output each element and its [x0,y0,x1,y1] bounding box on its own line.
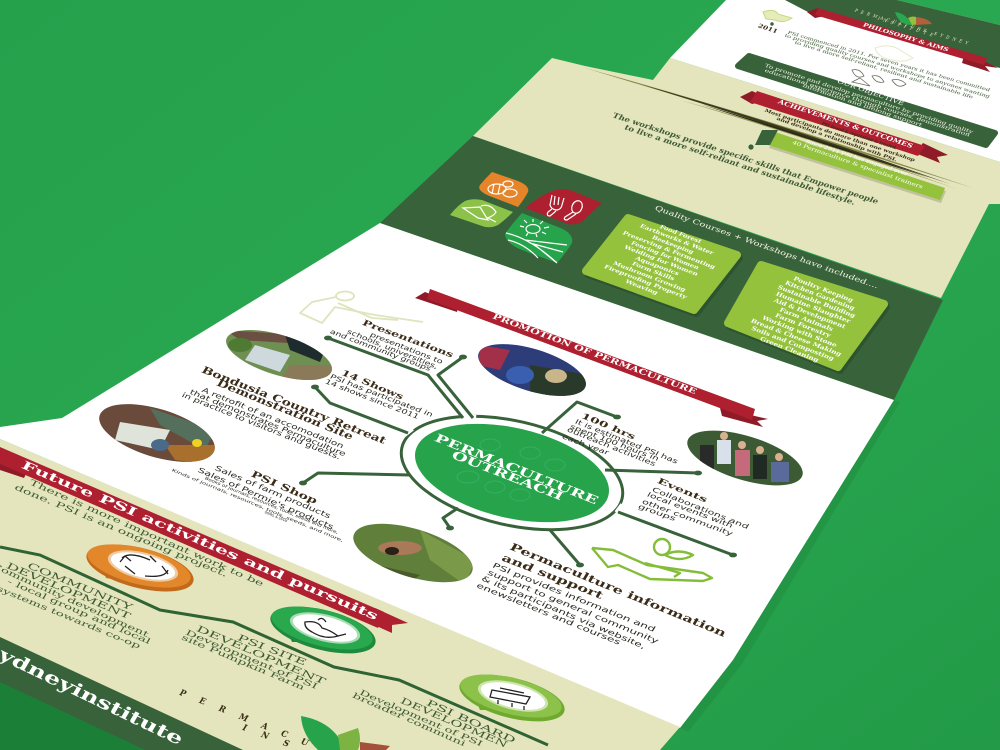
year 2011: 2011 [756,23,779,35]
text: permaculture information: support to general community [486,568,661,646]
photo: garden beds [226,330,332,380]
text: events: other community [640,498,735,538]
text: presentations: and community groups [328,328,432,373]
text: presentations: presentations to [368,331,445,366]
text: 100 hours: It is estimated PSI has [573,418,679,466]
icon: orange bee leaf [479,172,528,207]
text: community development [0,560,152,651]
text: Bondusia country retreat: A retrofit of an accomodation [200,386,345,451]
text: permaculture information: and support [499,553,606,603]
text: community development: COMMUNITY [25,560,137,613]
text: events: local events with [645,491,735,530]
text: 14 shows: 14 shows since 2011 [323,378,421,421]
text: permaculture information: PSI provides information and [491,561,657,634]
ribbon: philosophy and aims [807,8,998,72]
hub disc [405,407,619,539]
ring gaps [403,416,623,513]
panel: dark footer band [0,637,243,750]
text: workshops intro [611,111,880,207]
text: workshops intro: to live a more self-reliant and sustainable lifestyle. [623,123,857,207]
callout: our objective box: OUR OBJECTIVE [835,78,906,108]
photo: group of people [687,430,803,486]
hub leaf pattern [457,439,565,501]
card: course list one: Fireproofing Property [602,264,689,301]
text: Bondusia country retreat: in practice to visitors and guests. [180,392,342,462]
icon: presenter [300,292,423,323]
text: 100 hours: spent 100 hours in [568,423,661,463]
card: course list two: Soils and Composting [750,325,836,363]
panel: cream workshops page [473,56,1000,298]
card: course list one [586,218,739,313]
text: Bondusia country retreat: Demonstration Site [214,378,356,443]
ribbon: achievements and outcomes [740,91,948,163]
text: achievements: Most participants do more than one workshop [763,108,917,163]
shadow on right page edge [680,400,900,732]
text: PSI shop: Sales of farm products [213,464,332,520]
icon: pale sketch [875,46,913,61]
text: events [636,476,751,538]
hub title [432,432,601,508]
text: PSI shop: books, & DVDs [264,510,288,523]
text: 14 shows: PSI has participated in [328,373,435,419]
text: PSI site development: site Pumpkin Farm [180,633,308,693]
hub ring [390,397,634,549]
text: events: Collaborations and [650,486,751,531]
panel: white outreach page [0,223,894,728]
icon: 2011 plant [763,10,792,26]
ribbon: promotion of permaculture [415,289,768,427]
text: PSI site development: Development of PSI [184,628,320,691]
card: course list two: Humaine Slaughter [774,291,852,325]
card: course list one: Preserving & Fermenting [621,230,718,271]
text: PSI site development [180,624,328,693]
callout: our objective box [738,56,995,145]
text: PSI shop: Kinds of journals, resources, tools, seeds, and more, [171,468,344,543]
text: achievements: and develop a relationship with PSI. [775,116,899,163]
ribbon: philosophy and aims: PHILOSOPHY & AIMS [861,22,951,54]
heading: quality courses: Quality Courses + Workshops have included.... [653,204,880,290]
ribbon: future activities [0,447,408,633]
icon: green sun and field leaf [505,213,572,263]
photo: cob oven in forest [353,524,473,582]
text: presentations: Presentations [360,318,456,360]
card: course list one: Earthworks & Water [638,223,716,257]
text: achievements: PSI brand & reputation is trusted. [820,120,899,151]
callout: our objective box: educational experience through courses, demonstration [763,68,972,138]
panel: dark courses band [380,136,943,400]
hub diagram [299,336,737,567]
card: course list one: Welding for Women [621,244,701,278]
text: permaculture information [475,542,729,651]
text: 14 shows [323,368,435,421]
card: course list one: Aquaponics [632,255,681,278]
text: 14 shows: 14 Shows [339,368,406,402]
text: PSI board development [351,688,518,750]
text: PSI shop: Books of journals, resources, tools, seeds and more, [204,476,339,535]
callout: trainers banner [748,130,946,203]
text: 100 hours: each year [560,433,611,457]
icon: hand with leaves [592,539,712,581]
text: 100 hours [560,410,679,468]
card: course list two: Farm Forestry [773,313,833,340]
header band [785,0,1000,68]
card: course list two: Sustainable Building [776,284,857,320]
text: philosophy paragraph [784,30,992,100]
logo: footer wordmark: PERMACU [177,688,311,748]
text: PSI site development: DEVELOPMENT [194,624,328,687]
card: course list two: Green Cleaning [758,336,820,364]
header logo text: INSTITUTE [876,16,935,38]
card: course list one: Mushroom Growing [611,260,688,294]
panel: top philosophy page [670,0,1000,162]
card: course list one: Weaving [622,278,661,297]
icon: red tools leaf [525,189,602,224]
text: Bondusia country retreat: Bondusia Country Retreat [199,365,388,447]
card: course list one: Beekeeping [650,234,696,256]
hub title: PERMACULTURE [432,432,601,508]
text: presentations: schools, universities, [345,328,440,371]
text: achievements [764,108,917,163]
card: course list two: Aid & Development [771,297,848,331]
card: course list two: Kitchen Gardening [783,280,857,312]
photo: produce table [99,404,215,462]
ribbon: achievements and outcomes: ACHIEVEMENTS & OUTCOMES [775,99,914,150]
card: course list two: Farm Animals [778,307,835,333]
marker: PSI site development [266,598,380,662]
text: future intro [13,478,265,589]
fold crease streak [585,68,973,190]
marker: community development [82,535,198,601]
icon: light green bucket leaf [450,199,513,227]
text: events: groups [636,504,677,523]
text: PSI board development: PSI BOARD [424,698,518,745]
text: PSI shop: Sales of Permie's products [196,466,335,532]
text: 100 hours: 100 hrs [579,410,638,442]
spokes [303,338,733,565]
callout: our objective box: To promote and develop permaculture by providing quality [763,62,976,135]
icon: seedlings [852,70,906,86]
text: permaculture information: enewsletters and courses [475,581,624,647]
text: future intro: done. PSI is an ongoing project. [13,483,229,579]
photo: blue workers [478,344,586,396]
text: future intro: There is more important work to be [28,478,265,589]
callout: trainers banner: 40 Permaculture & specialist trainers [790,140,925,191]
text: philosophy paragraph: PSI commenced in 2011. For seven years it has been committed [786,30,992,93]
text: workshops intro: The workshops provide specific skills that Empower people [611,111,880,206]
text: philosophy paragraph: to live a more self-reliant, resilient and sustainable life [793,40,976,100]
text: PSI shop: PSI Shop [249,468,321,506]
text: presentations [328,318,456,373]
card: course list two: Bread & Cheese Making [749,318,843,358]
logo: footer wordmark: INS [240,722,292,749]
text: community development: DEVELOPMENT [4,560,133,621]
hub title: OUTREACH [449,450,565,503]
timeline zigzag [0,547,548,745]
callout: our objective box: information and lifelong support [801,82,924,128]
text: Bondusia country retreat [180,365,388,462]
text: permaculture information: Permaculture information [507,542,729,640]
text: PSI board development: broader communi [351,691,467,748]
text: Bondusia country retreat: that demonstrates Permaculture [188,388,347,459]
card: course list one: Form Skills [630,261,677,283]
panel: cream future activities page [0,439,680,750]
text: PSI board development: DEVELOPMEN [398,696,510,750]
text: PSI site development: PSI SITE [235,632,309,667]
ribbon: promotion of permaculture: PROMOTION OF PERMACULTURE [491,312,698,396]
card: course list one: Food Forest [658,224,704,246]
text: PSI shop [171,464,344,543]
card: course list one: Fencing for Women [629,240,701,272]
ribbon: future activities: Future PSI activities and pursuits [19,460,381,623]
card: course list two: Working with Stone [759,314,838,349]
card: course list two: Poultry Keeping [792,276,855,304]
text: PSI board development: Development of PSI [358,688,485,749]
callout: trainers banner: Since 2011 PSI has engaged over [803,138,910,178]
text: 100 hours: outreach activities [565,426,657,468]
text: philosophy paragraph: to providing quality courses and workshops to anyones wanting [783,32,992,99]
text: community development: - local group and local [6,577,152,646]
text: permaculture information: & its participants via website, [480,574,647,651]
card: course list two [728,265,886,370]
marker: PSI board development [455,666,569,730]
spoke end dots [299,336,737,567]
header logo text: PERMACULTURE SYDNEY [853,8,970,46]
text: events: Events [655,476,710,505]
logo: leaves [301,716,390,750]
